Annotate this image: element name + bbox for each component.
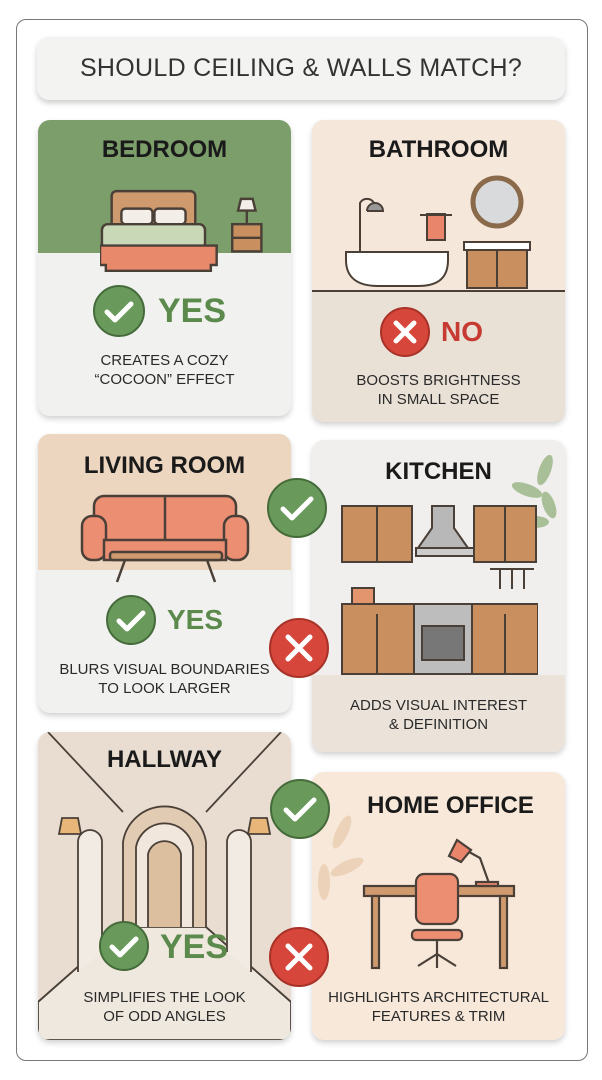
caption: living room: BLURS VISUAL BOUNDARIES [59,661,270,678]
badge: no: NO [441,316,483,347]
icon: leaves [512,454,556,528]
caption: bathroom: IN SMALL SPACE [378,391,499,408]
caption: home office [328,989,549,1025]
icon: red cross [380,307,430,357]
heading: kitchen: KITCHEN [385,458,492,485]
badge: yes [93,285,226,337]
caption: bedroom: CREATES A COZY [100,352,229,369]
panel: kitchen [312,440,565,752]
caption: home office: HIGHLIGHTS ARCHITECTURAL [328,989,549,1006]
icon: hallway corridor [38,732,291,1040]
caption: hallway [83,989,246,1025]
icon: faded leaves [318,816,364,900]
badge: no [380,307,483,357]
heading: bathroom: BATHROOM [369,136,508,163]
badge: yes [106,595,223,645]
badge: yes: YES [158,292,226,330]
caption: kitchen: & DEFINITION [389,716,488,733]
icon: green check [99,921,149,971]
caption: bedroom [94,352,234,388]
caption: kitchen [350,697,527,733]
title: SHOULD CEILING & WALLS MATCH? [80,54,522,82]
panel: bathroom [312,120,565,422]
panel: living room [38,434,291,713]
icon: green check [106,595,156,645]
heading: bedroom: BEDROOM [102,136,227,163]
icon: desk, chair, lamp [362,838,516,970]
badge: yes [99,921,228,971]
panel: bedroom [38,120,291,416]
caption: bathroom [356,372,521,408]
caption: living room [59,661,270,697]
icon: connector check (living/kitchen) [267,478,327,538]
badge: yes: YES [160,928,228,966]
icon: green check [93,285,145,337]
icon: sofa and table [80,494,250,582]
icon: connector check (hallway/office) [270,779,330,839]
caption: living room: TO LOOK LARGER [98,680,231,697]
caption: hallway: SIMPLIFIES THE LOOK [83,989,246,1006]
icon: connector cross (hallway/office) [269,927,329,987]
caption: bathroom: BOOSTS BRIGHTNESS [356,372,521,389]
badge: yes: YES [167,604,223,635]
icon: bathtub, towel, mirror, vanity [345,176,531,289]
icon: connector cross (living/kitchen) [269,618,329,678]
caption: hallway: OF ODD ANGLES [103,1008,226,1025]
panel: hallway [38,732,291,1040]
caption: kitchen: ADDS VISUAL INTEREST [350,697,527,714]
icon: bed and nightstand [100,190,263,272]
caption: bedroom: “COCOON” EFFECT [94,371,234,388]
heading: living room: LIVING ROOM [84,452,245,479]
heading: home office: HOME OFFICE [367,792,534,819]
title [37,37,565,100]
icon: kitchen cabinets and stove [341,505,538,675]
panel: home office [312,772,565,1040]
heading: hallway: HALLWAY [107,746,222,773]
caption: home office: FEATURES & TRIM [372,1008,505,1025]
